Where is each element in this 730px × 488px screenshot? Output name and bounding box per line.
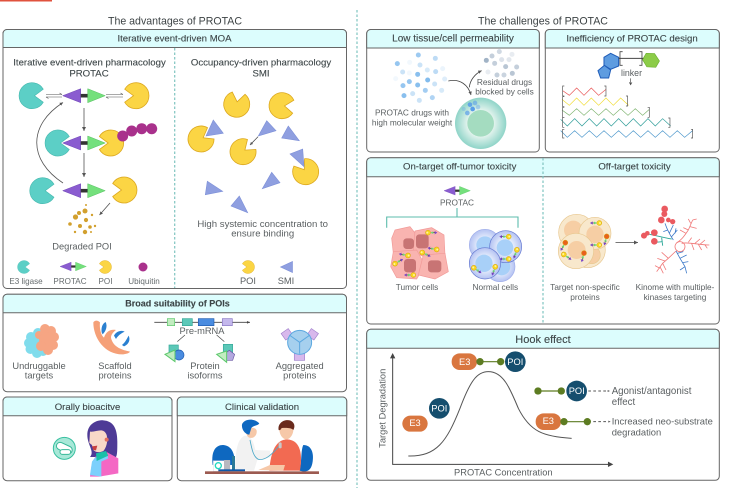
- PROTAC heading: Iterative event-driven pharmacology: [13, 57, 166, 68]
- legend: PROTAC side: POI: [99, 277, 112, 286]
- label: degradation: degradation: [612, 426, 661, 438]
- node label: POI left: POI: [431, 404, 447, 414]
- panel title: POIs: Broad suitability of POIs: [125, 298, 230, 308]
- illustration: linker series: [561, 50, 693, 138]
- x axis label: PROTAC Concentration: [454, 468, 553, 478]
- arrow: cells to kinome: [616, 242, 638, 244]
- panel: inefficiency of design: [545, 30, 719, 152]
- label: increased neo-substrate: Increased neo-substrate: [612, 415, 713, 426]
- panel title: on-target: On-target off-tumor toxicity: [403, 162, 517, 172]
- heading: advantages: The advantages of PROTAC: [108, 16, 242, 28]
- label: linker: linker: [621, 68, 642, 78]
- panel title: hook effect: Hook effect: [515, 334, 571, 346]
- text: high systemic concentration: High systemic concentration to: [197, 219, 328, 230]
- label: scaffold proteins line 2: proteins: [98, 370, 132, 380]
- panel title: permeability: Low tissue/cell permeability: [392, 34, 514, 44]
- icon: aggregated proteins: [281, 329, 318, 360]
- label: undruggable targets: Undruggable: [12, 361, 66, 371]
- panel: iterative event-driven MOA: [3, 30, 346, 288]
- top accent bar: [0, 0, 52, 2]
- y axis label: Target Degradation: [377, 369, 387, 448]
- panel: toxicity: [367, 158, 719, 324]
- panel title: MOA: Iterative event-driven MOA: [117, 34, 232, 44]
- SMI occupancy diagram: [183, 91, 324, 213]
- label: protein isoforms: Protein: [190, 361, 220, 371]
- chart: hook curve: [390, 351, 613, 467]
- label: target non-specific: Target non-specific: [550, 282, 620, 292]
- illustration: kinome tree: [641, 206, 709, 273]
- label: undruggable targets line 2: targets: [25, 370, 54, 380]
- text: ensure binding: ensure binding: [231, 228, 294, 239]
- SMI subheading: SMI: [252, 68, 270, 80]
- icon: woman: [87, 420, 118, 477]
- label: proteins: proteins: [570, 292, 600, 302]
- label: aggregated proteins: Aggregated: [276, 361, 324, 371]
- illustration: drugs and cell: [393, 49, 519, 149]
- panel: orally bioactive: [3, 397, 172, 481]
- legend: PROTAC side: Ubiquitin: [128, 277, 160, 286]
- center divider: [356, 10, 358, 488]
- legend: PROTAC side: [9, 260, 160, 286]
- panel title: clinical: Clinical validation: [225, 402, 299, 413]
- heading: challenges: The challenges of PROTAC: [478, 16, 608, 28]
- label: PROTAC drugs: PROTAC drugs with: [375, 108, 449, 118]
- illustration: doctor and patient: [205, 420, 319, 474]
- bracket: [387, 208, 518, 228]
- label: effect: effect: [612, 397, 636, 408]
- panel title: orally: Orally bioacitve: [55, 402, 120, 413]
- label: high molecular weight: high molecular weight: [372, 117, 453, 127]
- node label: E3 left: E3: [409, 418, 421, 428]
- legend: PROTAC side: E3 ligase: [9, 277, 43, 286]
- icon: scaffold proteins: [93, 321, 130, 354]
- label: degraded POI: Degraded POI: [52, 241, 112, 251]
- illustration: non-specific target cells: [558, 214, 611, 269]
- node label: E3 right: E3: [543, 416, 554, 426]
- node label: E3 top: E3: [459, 357, 470, 367]
- illustration: tumor and normal cells: [391, 227, 522, 282]
- panel title: design: Inefficiency of PROTAC design: [566, 34, 698, 44]
- label: blocked by cells: blocked by cells: [475, 87, 534, 97]
- icon: pre-mRNA and isoforms: [154, 319, 250, 362]
- icon: pill: [53, 437, 75, 459]
- label: aggregated proteins line 2: proteins: [283, 370, 317, 380]
- label: normal cells: Normal cells: [472, 282, 518, 292]
- label: residual drugs: Residual drugs: [477, 77, 532, 87]
- label: agonist: Agonist/antagonist: [612, 386, 692, 397]
- icon: undruggable targets: [24, 324, 59, 358]
- label: tumor cells: Tumor cells: [396, 282, 438, 292]
- legend: SMI side: SMI: [278, 276, 294, 286]
- label: kinases targeting: kinases targeting: [644, 292, 707, 302]
- legend: SMI side: POI: [240, 276, 256, 286]
- panel: clinical validation: [177, 397, 347, 481]
- label: pre-mRNA: Pre-mRNA: [180, 326, 225, 336]
- label: protein isoforms line 2: isoforms: [187, 370, 223, 380]
- label: kinome: Kinome with multiple-: [636, 282, 715, 292]
- PROTAC cycle diagram: [19, 83, 157, 234]
- node label: POI top: POI: [507, 357, 523, 367]
- node label: POI right: POI: [569, 386, 585, 396]
- PROTAC subheading: PROTAC: [69, 68, 109, 80]
- panel: hook effect: [367, 329, 719, 480]
- SMI heading: Occupancy-driven pharmacology: [191, 57, 331, 68]
- legend: SMI side: [240, 260, 294, 286]
- label: scaffold proteins: Scaffold: [98, 361, 132, 371]
- panel: broad suitability of POIs: [3, 294, 346, 392]
- legend: PROTAC side: PROTAC: [53, 277, 87, 286]
- label: PROTAC: PROTAC: [440, 198, 474, 208]
- panel: low permeability: [367, 30, 539, 152]
- panel title: off-target: Off-target toxicity: [598, 162, 671, 172]
- icon: PROTAC small: [444, 186, 470, 195]
